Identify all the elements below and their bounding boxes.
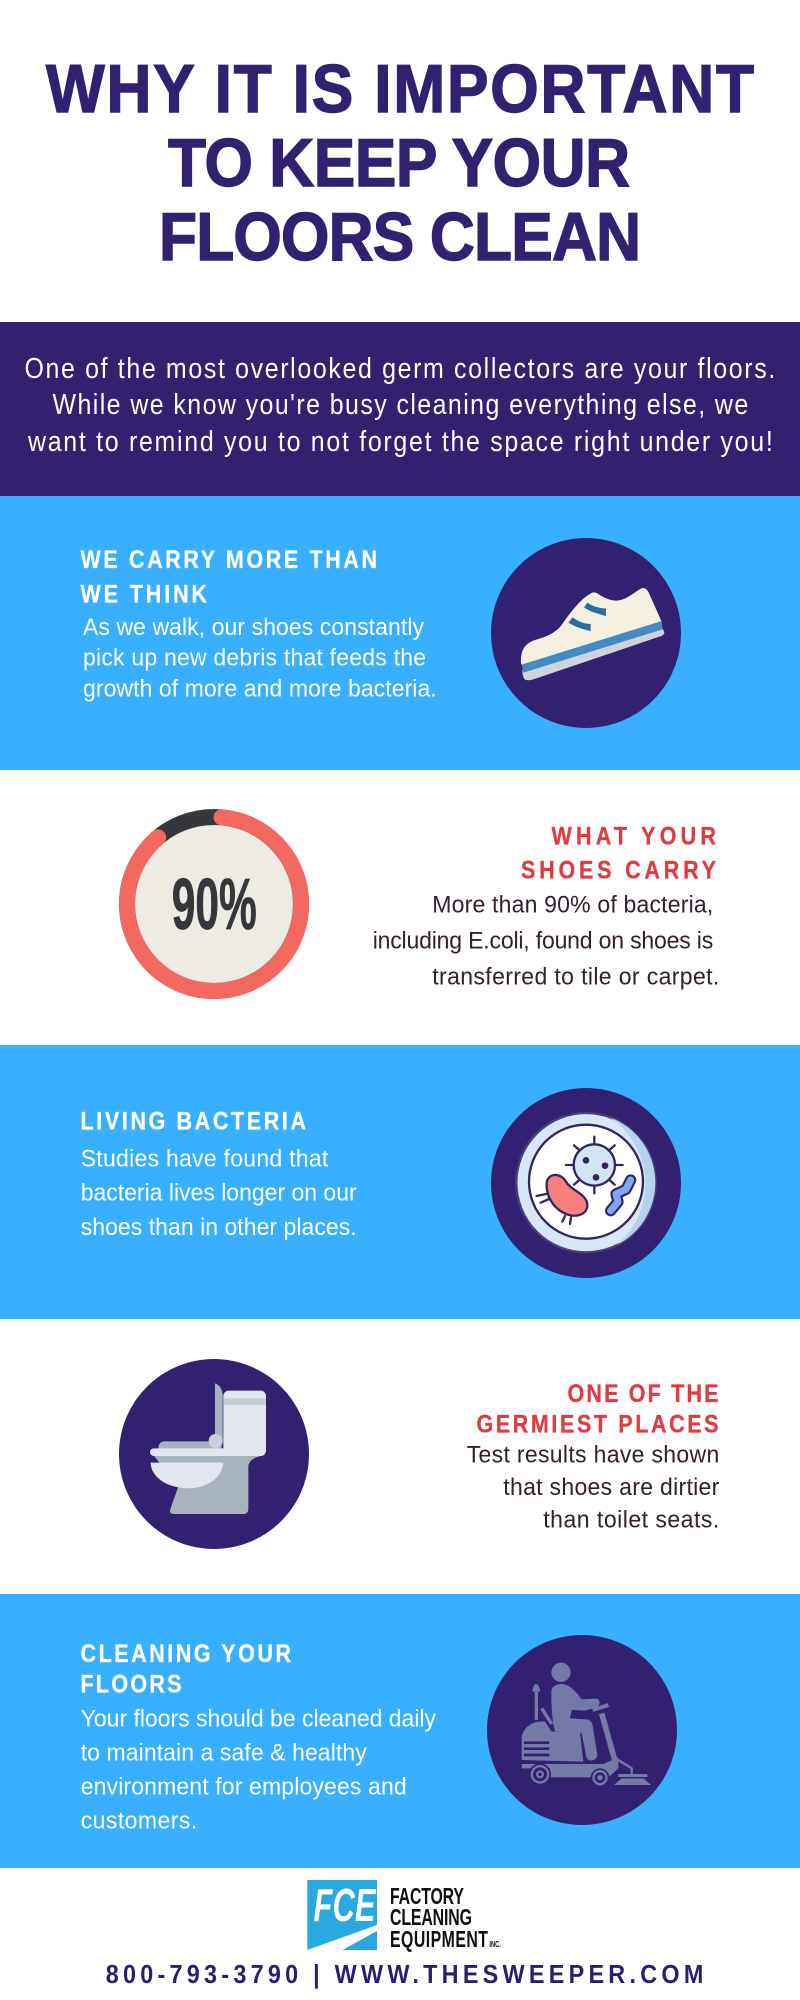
heading: cleaning your floors: CLEANING YOUR bbox=[80, 1639, 291, 1667]
body text: shoes dirtier than toilet seats: than toilet seats. bbox=[543, 1506, 719, 1534]
body text: clean floors daily bbox=[81, 1705, 436, 1834]
body text: shoes pick up debris: growth of more and more bacteria. bbox=[83, 675, 437, 702]
body text: shoes dirtier than toilet seats: that shoes are dirtier bbox=[503, 1473, 719, 1501]
intro text: While we know you're busy cleaning everything else, we bbox=[52, 388, 748, 420]
title: TO KEEP YOUR bbox=[168, 124, 630, 201]
icon: ride-on floor sweeper bbox=[487, 1635, 677, 1825]
heading: one of the germiest places: ONE OF THE bbox=[568, 1379, 719, 1407]
intro text bbox=[24, 352, 775, 457]
logo: company name: CLEANING bbox=[390, 1905, 472, 1931]
panel: what your shoes carry bbox=[0, 770, 800, 1045]
intro text: want to remind you to not forget the space right under you! bbox=[27, 425, 773, 457]
body text: shoes dirtier than toilet seats: Test results have shown bbox=[467, 1441, 719, 1468]
chart: 90 percent ring bbox=[127, 817, 301, 991]
body text: bacteria lives longer: bacteria lives longer on our bbox=[81, 1179, 357, 1207]
logo: FCE square: FCE bbox=[314, 1881, 377, 1932]
panel: living bacteria bbox=[0, 1045, 800, 1319]
title bbox=[46, 50, 754, 275]
heading: cleaning your floors: FLOORS bbox=[80, 1670, 181, 1698]
body text: bacteria lives longer bbox=[81, 1145, 357, 1241]
heading: one of the germiest places: GERMIEST PLACES bbox=[476, 1410, 719, 1438]
logo: company name: EQUIPMENT bbox=[390, 1927, 488, 1953]
panel: we carry more than we think bbox=[0, 496, 800, 770]
heading: living bacteria: LIVING BACTERIA bbox=[80, 1107, 306, 1135]
body text: clean floors daily: environment for employees and bbox=[81, 1773, 407, 1800]
body text: 90 percent of bacteria bbox=[373, 891, 719, 991]
body text: shoes dirtier than toilet seats bbox=[467, 1441, 719, 1534]
heading: what your shoes carry: WHAT YOUR bbox=[552, 822, 716, 850]
chart: 90 percent ring: 90% bbox=[172, 863, 257, 945]
logo: company name bbox=[390, 1884, 501, 1953]
body text: bacteria lives longer: shoes than in other places. bbox=[81, 1213, 357, 1241]
panel: cleaning your floors bbox=[0, 1594, 800, 1868]
heading: we carry more than we think bbox=[80, 545, 377, 608]
footer bbox=[106, 1880, 703, 1989]
logo: company name: INC. bbox=[489, 1941, 501, 1949]
icon: petri dish with bacteria bbox=[491, 1088, 681, 1278]
icon: shoe bbox=[491, 538, 681, 728]
panel: one of the germiest places bbox=[0, 1319, 800, 1594]
body text: 90 percent of bacteria: including E.coli, found on shoes is bbox=[373, 927, 713, 954]
panel: intro bbox=[0, 322, 800, 496]
body text: bacteria lives longer: Studies have found that bbox=[81, 1145, 329, 1173]
body text: 90 percent of bacteria: More than 90% of bacteria, bbox=[432, 891, 713, 919]
heading: what your shoes carry bbox=[521, 822, 716, 884]
contact line: 800-793-3790 | WWW.THESWEEPER.COM bbox=[106, 1961, 703, 1989]
body text: shoes pick up debris bbox=[83, 613, 437, 702]
title: WHY IT IS IMPORTANT bbox=[46, 50, 754, 127]
icon: toilet bbox=[119, 1359, 309, 1549]
logo: FCE square bbox=[307, 1880, 377, 1950]
heading: cleaning your floors bbox=[80, 1639, 291, 1698]
body text: 90 percent of bacteria: transferred to tile or carpet. bbox=[432, 963, 719, 991]
heading: one of the germiest places bbox=[476, 1379, 719, 1438]
title: FLOORS CLEAN bbox=[159, 198, 641, 275]
body text: clean floors daily: to maintain a safe & healthy bbox=[81, 1739, 367, 1767]
heading: we carry more than we think: WE CARRY MORE THAN bbox=[80, 545, 377, 573]
logo: company name: FACTORY bbox=[390, 1884, 464, 1910]
intro text: One of the most overlooked germ collectors are your floors. bbox=[24, 352, 775, 384]
body text: shoes pick up debris: As we walk, our shoes constantly bbox=[83, 613, 424, 641]
body text: clean floors daily: Your floors should be cleaned daily bbox=[81, 1705, 436, 1733]
body text: shoes pick up debris: pick up new debris that feeds the bbox=[83, 644, 426, 672]
body text: clean floors daily: customers. bbox=[81, 1807, 197, 1834]
heading: what your shoes carry: SHOES CARRY bbox=[521, 856, 716, 884]
heading: we carry more than we think: WE THINK bbox=[80, 580, 207, 608]
